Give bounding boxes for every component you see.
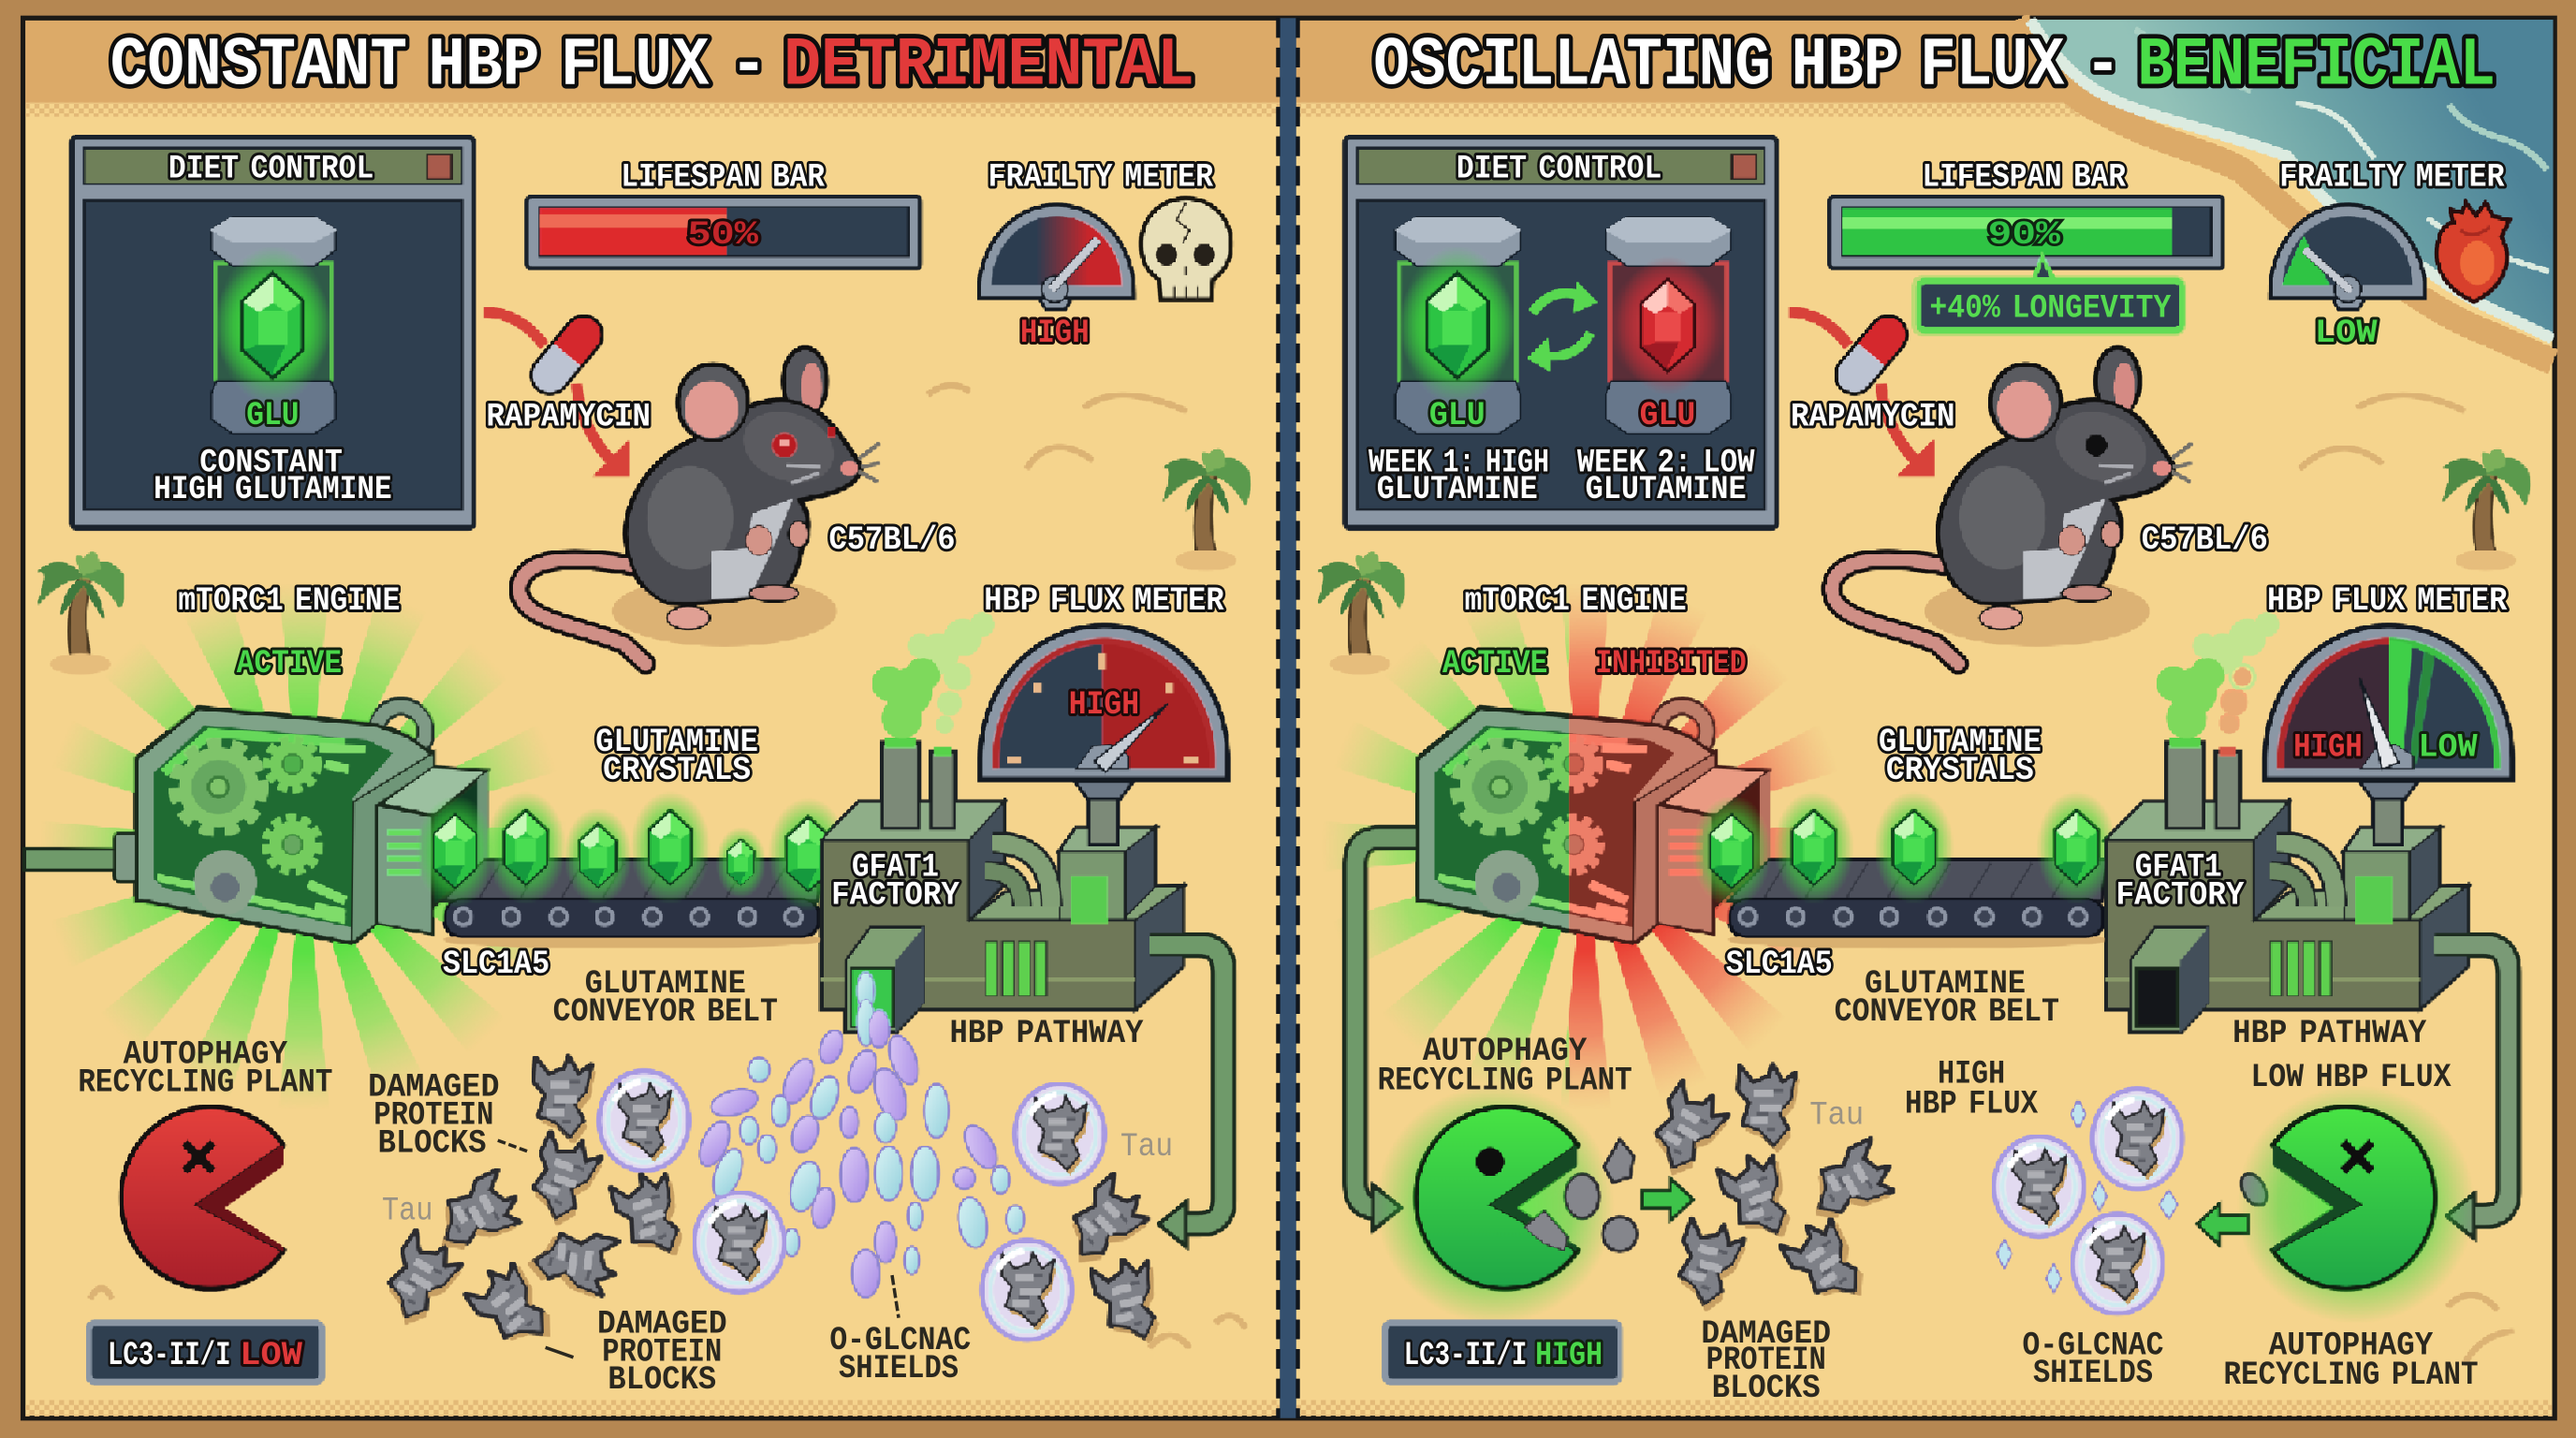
orange smoke: [2219, 668, 2252, 733]
heading: diet control: DIET CONTROL: [1456, 151, 1661, 188]
callout text: +40% longevity: +40% LONGEVITY: [1929, 290, 2171, 328]
label: autophagy plant: [78, 1036, 332, 1101]
O-GlcNAc shielded proteins: [600, 1071, 1104, 1340]
protein fragment: [2237, 1170, 2271, 1209]
label: GFAT1 factory: FACTORY: [831, 876, 959, 914]
icon: window button: [427, 154, 452, 179]
caption: constant high glutamine: [154, 445, 392, 508]
artwork: constant panel: [24, 138, 1250, 1382]
icon: red pac-man autophagy plant: [122, 1108, 283, 1288]
panel: constant HBP flux (detrimental): [24, 28, 1250, 1399]
label: rapamycin: RAPAMYCIN: [1791, 399, 1955, 436]
arrow: green right: [1643, 1180, 1692, 1219]
label: damaged protein blocks: [1701, 1315, 1831, 1407]
arrow: diet to rapamycin: [1789, 312, 1848, 345]
label: glutamine crystals: CRYSTALS: [1886, 752, 2034, 789]
label: conveyor belt: GLUTAMINE: [1865, 965, 2026, 1003]
arrow: rapamycin to mouse: [1881, 385, 1934, 477]
label: hbp pathway: HBP PATHWAY: [949, 1015, 1144, 1052]
label: autophagy plant left: AUTOPHAGY: [1423, 1033, 1587, 1070]
label: damaged protein blocks lower: DAMAGED: [597, 1305, 727, 1343]
label: LC3 low: LC3-II/I: [108, 1337, 231, 1374]
glutamine crystals on belt: [416, 792, 848, 910]
icon: heart: [2437, 204, 2509, 301]
label: SLC1A5: SLC1A5: [443, 946, 549, 983]
label: GFAT1 factory: GFAT1: [852, 849, 939, 887]
header band: [25, 21, 2553, 103]
icon: green pac-man eating: [1377, 1086, 1614, 1323]
label: damaged protein blocks upper: PROTEIN: [373, 1097, 493, 1135]
icon: window button: [1732, 154, 1756, 179]
badge: LC3 low: [89, 1323, 322, 1382]
label: GFAT1 factory: [831, 849, 959, 914]
HBP flux gauge: [981, 626, 1227, 844]
label: mtorc1 engine: mTORC1 ENGINE: [1465, 582, 1687, 620]
label: damaged protein blocks: BLOCKS: [1712, 1370, 1821, 1407]
label: high frailty: HIGH: [1020, 315, 1090, 352]
arrow: green left: [2198, 1205, 2247, 1244]
label: high HBP flux: HIGH: [1938, 1056, 2005, 1093]
heading: diet control: DIET CONTROL: [168, 151, 373, 188]
label: autophagy plant right: RECYCLING PLANT: [2224, 1357, 2479, 1394]
label: tau left: Tau: [382, 1192, 432, 1229]
icon: rapamycin pill: [1826, 307, 1916, 403]
label: conveyor belt: CONVEYOR BELT: [553, 993, 778, 1031]
label: active: ACTIVE: [237, 645, 342, 682]
label: low HBP flux: LOW HBP FLUX: [2250, 1059, 2452, 1096]
label: damaged protein blocks upper: BLOCKS: [378, 1124, 487, 1162]
green smoke: [872, 613, 994, 738]
label: autophagy plant left: [1378, 1033, 1632, 1100]
pipe: factory to right pac-man: [2435, 945, 2509, 1238]
label: GFAT1 factory: FACTORY: [2116, 876, 2244, 914]
factory door lit: [851, 968, 894, 1027]
badge: LC3 high: [1385, 1323, 1620, 1382]
label: o-glcnac shields: O-GLCNAC: [2023, 1327, 2163, 1364]
label: GLU green: GLU: [1429, 397, 1486, 434]
label: o-glcnac shields: SHIELDS: [2033, 1355, 2153, 1392]
panel: oscillating HBP flux (beneficial): [1318, 28, 2529, 1407]
caption: week 2: [1577, 445, 1755, 508]
label: conveyor belt: [553, 965, 778, 1031]
icon: mouse with red eye: [520, 348, 879, 664]
icon: palm tree right: [2443, 448, 2529, 570]
label: o-glcnac shields: O-GLCNAC: [829, 1322, 971, 1359]
dune marks: [91, 386, 1245, 1347]
callout box: longevity: [1912, 257, 2185, 335]
panel: diet control: [72, 138, 473, 527]
GFAT1 factory: [2106, 738, 2467, 1032]
label: damaged protein blocks lower: [546, 1305, 727, 1399]
conveyor belt: [1728, 859, 2106, 948]
title: oscillating flux: OSCILLATING HBP FLUX -: [1373, 28, 2121, 106]
GFAT1 factory: [822, 738, 1183, 1032]
label: GLU: GLU: [246, 397, 299, 434]
mouse eye: [772, 427, 835, 458]
label: LC3 low: LOW: [240, 1337, 303, 1374]
label: high HBP flux: HBP FLUX: [1905, 1085, 2039, 1123]
gauge reading low: LOW: [2419, 728, 2479, 766]
icon: healthy mouse: [1832, 348, 2191, 664]
pipe: engine to autophagy: [1355, 838, 1423, 1229]
damaged protein blocks: [372, 1057, 1171, 1361]
label: o-glcnac shields: [829, 1275, 971, 1387]
arrow: diet to rapamycin: [485, 312, 544, 345]
pipe: factory to proteins: [1150, 945, 1224, 1245]
arrow: rapamycin to mouse: [577, 385, 629, 477]
label: glutamine crystals: [595, 724, 758, 789]
label: hbp pathway: HBP PATHWAY: [2232, 1015, 2426, 1052]
label: glutamine crystals: GLUTAMINE: [595, 724, 758, 761]
label: damaged protein blocks lower: PROTEIN: [602, 1333, 722, 1371]
label: damaged protein blocks: DAMAGED: [1701, 1315, 1831, 1353]
label: GFAT1 factory: [2116, 849, 2244, 914]
frailty gauge low: [2271, 205, 2425, 309]
label: mouse strain: C57BL/6: [2142, 521, 2268, 559]
label: o-glcnac shields: SHIELDS: [839, 1350, 959, 1387]
label: tau: Tau: [1809, 1097, 1864, 1135]
icon: rapamycin pill: [522, 307, 611, 403]
damaged protein blocks: [1638, 1064, 1902, 1317]
caption: constant high glutamine: HIGH GLUTAMINE: [154, 471, 392, 508]
label: mtorc1 engine: mTORC1 ENGINE: [178, 582, 400, 620]
label: damaged protein blocks upper: DAMAGED: [368, 1069, 500, 1107]
label: conveyor belt: CONVEYOR BELT: [1835, 993, 2059, 1031]
caption: week 2: GLUTAMINE: [1586, 471, 1747, 508]
ocean corner: [2017, 21, 2553, 361]
dune marks right: [2300, 395, 2513, 1364]
HBP flux gauge oscillating: [2265, 626, 2512, 844]
label: damaged protein blocks upper: [368, 1069, 529, 1162]
icon: green pac-man x-eye: [2237, 1086, 2474, 1323]
label: autophagy plant right: AUTOPHAGY: [2269, 1327, 2433, 1364]
label: low frailty: LOW: [2315, 315, 2378, 352]
label: lifespan bar: LIFESPAN BAR: [621, 158, 826, 196]
icon: skull: [1142, 198, 1231, 299]
title: constant flux: CONSTANT HBP FLUX -: [110, 28, 768, 106]
mTORC1 engine green half: [1415, 704, 1569, 932]
caption: week 2: WEEK 2: LOW: [1577, 445, 1755, 482]
icon: palm tree left: [37, 552, 124, 674]
label: inhibited: INHIBITED: [1595, 645, 1747, 682]
glutamine crystals on belt: [1692, 792, 2116, 907]
label: damaged protein blocks lower: BLOCKS: [607, 1361, 716, 1399]
value: 50%: 50%: [688, 216, 759, 254]
label: hbp flux meter: HBP FLUX METER: [2267, 582, 2508, 620]
label: tau right: Tau: [1120, 1128, 1173, 1166]
label: rapamycin: RAPAMYCIN: [487, 399, 651, 436]
icon: swap arrows: [1528, 283, 1597, 372]
label: LC3 high: HIGH: [1535, 1337, 1603, 1374]
icon: green cylinder: [1396, 217, 1520, 433]
conveyor belt: [444, 859, 822, 948]
output pipe to engine: [24, 833, 138, 881]
lifespan bar 50%: [527, 198, 920, 268]
lifespan bar 90%: [1830, 198, 2223, 268]
label: lifespan bar: LIFESPAN BAR: [1922, 158, 2127, 196]
label: glutamine crystals: [1879, 724, 2042, 789]
title: constant flux: [110, 28, 1194, 106]
label: autophagy plant left: RECYCLING PLANT: [1378, 1063, 1632, 1100]
label: autophagy plant: RECYCLING PLANT: [78, 1064, 332, 1101]
gauge reading high: HIGH: [1069, 686, 1139, 724]
mTORC1 engine red half: [1569, 697, 1771, 947]
glow rays red half: [1323, 583, 1848, 1109]
protein fragments being eaten: [1566, 1140, 1636, 1251]
label: conveyor belt: [1835, 965, 2059, 1031]
center divider: [1278, 18, 1298, 1418]
glow rays green half: [1333, 595, 1569, 1097]
factory door dark: [2136, 968, 2178, 1027]
title: constant flux: DETRIMENTAL: [783, 28, 1194, 106]
label: active: ACTIVE: [1442, 645, 1547, 682]
frailty gauge high: [979, 205, 1134, 309]
label: SLC1A5: SLC1A5: [1726, 946, 1833, 983]
O-GlcNAc droplets spray: [695, 973, 1023, 1297]
icon: red cylinder: [1606, 217, 1731, 433]
mTORC1 engine machine: [137, 707, 488, 944]
value: 90%: 90%: [1988, 216, 2061, 254]
label: o-glcnac shields: [2023, 1327, 2163, 1392]
label: glutamine crystals: CRYSTALS: [603, 752, 751, 789]
caption: week 1: [1368, 445, 1549, 508]
label: autophagy plant: AUTOPHAGY: [124, 1036, 287, 1074]
mouse eye: [2085, 433, 2108, 457]
title: oscillating flux: BENEFICIAL: [2137, 28, 2496, 106]
label: high HBP flux: [1905, 1056, 2039, 1123]
glow rays: [41, 583, 567, 1109]
caption: week 1: GLUTAMINE: [1377, 471, 1538, 508]
caption: constant high glutamine: CONSTANT: [199, 445, 343, 482]
label: LC3 high: LC3-II/I: [1404, 1337, 1527, 1374]
label: conveyor belt: GLUTAMINE: [585, 965, 746, 1003]
gauge reading high: HIGH: [2293, 728, 2363, 766]
label: mouse strain: C57BL/6: [828, 521, 956, 559]
label: glutamine crystals: GLUTAMINE: [1879, 724, 2042, 761]
label: frailty meter: FRAILTY METER: [988, 158, 1214, 196]
O-GlcNAc shielded proteins: [1995, 1090, 2182, 1313]
label: frailty meter: FRAILTY METER: [2279, 158, 2505, 196]
icon: glutamine cylinder: [212, 217, 336, 433]
label: damaged protein blocks: PROTEIN: [1706, 1342, 1826, 1379]
green smoke: [2157, 613, 2278, 738]
label: autophagy plant right: [2224, 1327, 2479, 1394]
artwork: oscillating panel: [1318, 138, 2529, 1382]
panel: diet control: [1345, 138, 1776, 527]
caption: week 1: WEEK 1: HIGH: [1368, 445, 1549, 482]
icon: palm tree left: [1318, 552, 1404, 674]
label: GFAT1 factory: GFAT1: [2135, 849, 2222, 887]
label: hbp flux meter: HBP FLUX METER: [984, 582, 1224, 620]
label: GLU red: GLU: [1640, 397, 1695, 434]
icon: palm tree upper right: [1164, 448, 1250, 570]
